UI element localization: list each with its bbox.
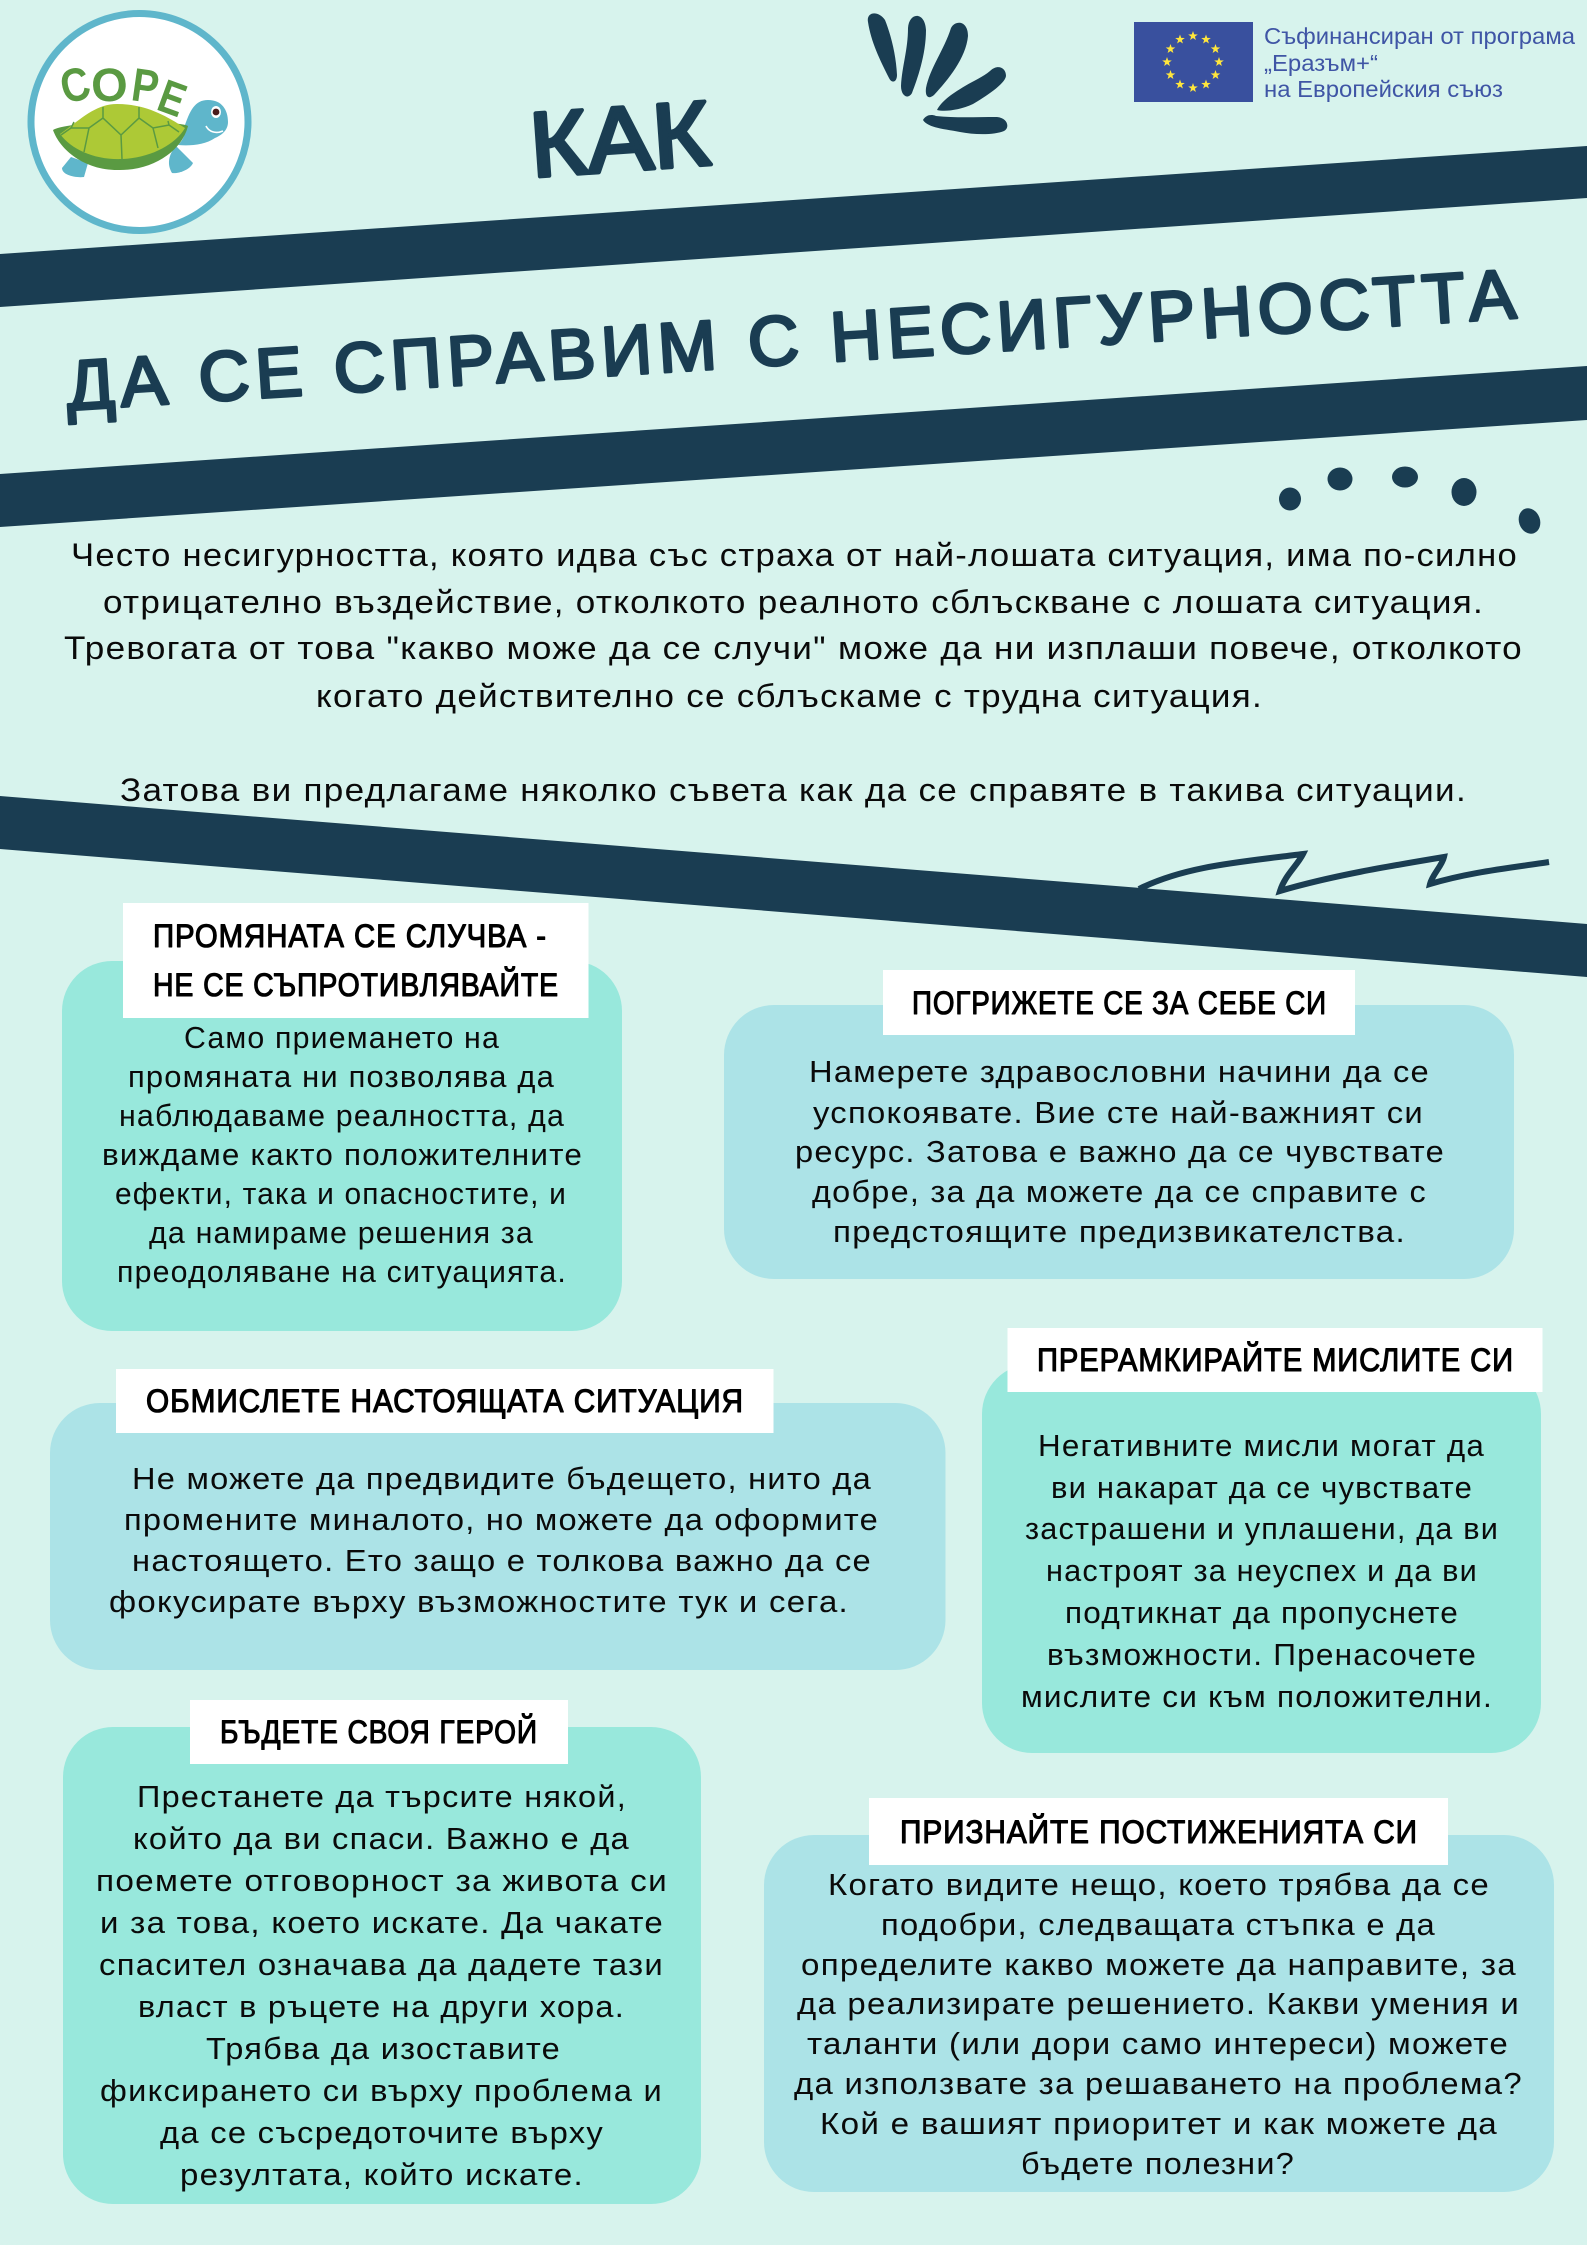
panel body text: и за това, което искате. Да чакате: [100, 1905, 664, 1940]
panel body text: ви накарат да се чувствате: [1051, 1470, 1473, 1505]
panel heading: [1008, 1328, 1542, 1392]
decoration: diagonal divider band: [0, 796, 1587, 977]
panel body text: резултата, който искате.: [180, 2157, 584, 2192]
logo: EU co-funding mark: [1134, 22, 1575, 102]
panel body text: [795, 1054, 1445, 1249]
panel body text: Само приемането на: [184, 1020, 500, 1055]
intro text: Често несигурността, която идва със страха от най-лошата ситуация, има по-силно: [71, 537, 1518, 573]
panel body text: успокоявате. Вие сте най-важният си: [813, 1095, 1424, 1130]
logo wordmark: C: [55, 57, 96, 114]
panel: acknowledge your achievements: [764, 1798, 1554, 2192]
co-funding text: на Европейския съюз: [1264, 76, 1503, 102]
panel body text: да намираме решения за: [149, 1215, 534, 1250]
panel body text: Трябва да изоставите: [206, 2031, 561, 2066]
co-funding text: [1264, 23, 1575, 102]
panel body text: поемете отговорност за живота си: [96, 1863, 668, 1898]
panel: take care of yourself: [724, 970, 1514, 1279]
panel body text: Кой е вашият приоритет и как можете да: [820, 2106, 1498, 2141]
co-funding text: „Еразъм+“: [1264, 50, 1378, 76]
intro text: [64, 537, 1523, 808]
panel body text: промяната ни позволява да: [128, 1059, 555, 1094]
title: main line: ДА СЕ СПРАВИМ С НЕСИГУРНОСТТА: [64, 255, 1524, 425]
panel heading: НЕ СЕ СЪПРОТИВЛЯВАЙТЕ: [153, 967, 559, 1003]
panel body text: ресурс. Затова е важно да се чувствате: [795, 1134, 1445, 1169]
logo wordmark: E: [151, 70, 193, 128]
panel body text: който да ви спаси. Важно е да: [133, 1821, 630, 1856]
panel body text: възможности. Пренасочете: [1047, 1637, 1477, 1672]
panel heading: ПРЕРАМКИРАЙТЕ МИСЛИТЕ СИ: [1037, 1342, 1514, 1378]
panel body text: фокусирате върху възможностите тук и сега.: [109, 1584, 849, 1619]
panel body text: застрашени и уплашени, да ви: [1025, 1511, 1499, 1546]
panel heading: ПРИЗНАЙТЕ ПОСТИЖЕНИЯТА СИ: [900, 1814, 1418, 1850]
decoration: lower title band: [0, 366, 1587, 527]
panel body text: бъдете полезни?: [1021, 2146, 1295, 2181]
intro text: когато действително се сблъскаме с трудна ситуация.: [316, 678, 1263, 714]
panel heading: [883, 970, 1355, 1035]
panel body text: Престанете да търсите някой,: [137, 1779, 627, 1814]
panel heading: [123, 903, 588, 1018]
logo: COPE turtle badge: [31, 14, 248, 230]
icon: EU flag: [1134, 22, 1253, 102]
panel heading: ПОГРИЖЕТЕ СЕ ЗА СЕБЕ СИ: [912, 985, 1327, 1021]
panel body text: спасител означава да дадете тази: [99, 1947, 664, 1982]
panel body text: да реализирате решението. Какви умения и: [797, 1986, 1520, 2021]
intro text: Тревогата от това "какво може да се случи" може да ни изплаши повече, отколкото: [64, 630, 1523, 666]
panel: consider the present situation: [50, 1369, 946, 1670]
logo wordmark: O: [90, 57, 129, 112]
panel heading: ОБМИСЛЕТЕ НАСТОЯЩАТА СИТУАЦИЯ: [146, 1383, 744, 1419]
panel body text: Когато видите нещо, което трябва да се: [828, 1867, 1490, 1902]
panel body text: [102, 1020, 583, 1289]
panel body text: предстоящите предизвикателства.: [833, 1214, 1406, 1249]
panel body text: Намерете здравословни начини да се: [809, 1054, 1430, 1089]
panel body text: настоящето. Ето защо е толкова важно да се: [132, 1543, 872, 1578]
decoration: burst strokes: [868, 13, 1007, 134]
panel body text: фиксирането си върху проблема и: [100, 2073, 663, 2108]
panel body text: настроят за неуспех и да ви: [1046, 1553, 1478, 1588]
panel body text: да се съсредоточите върху: [160, 2115, 604, 2150]
panel body text: наблюдаваме реалността, да: [119, 1098, 565, 1133]
panel body text: [96, 1779, 668, 2192]
panel heading: БЪДЕТЕ СВОЯ ГЕРОЙ: [220, 1714, 538, 1750]
panel body text: добре, за да можете да се справите с: [812, 1174, 1427, 1209]
panel: be your own hero: [63, 1700, 701, 2204]
icon: turtle legs: [62, 146, 193, 177]
panel heading: [190, 1700, 568, 1764]
panel body text: преодоляване на ситуацията.: [117, 1254, 567, 1289]
title: first word: КАК: [526, 83, 713, 197]
panel body text: промените миналото, но можете да оформите: [124, 1502, 879, 1537]
panel body text: власт в ръцете на други хора.: [138, 1989, 625, 2024]
intro text: отрицателно въздействие, отколкото реалното сблъскване с лошата ситуация.: [103, 584, 1484, 620]
logo wordmark: P: [129, 59, 162, 114]
icon: turtle head: [178, 100, 228, 145]
panel body text: [109, 1461, 879, 1619]
panel body text: определите какво можете да направите, за: [801, 1947, 1517, 1982]
panel body text: таланти (или дори само интереси) можете: [807, 2026, 1509, 2061]
panel heading: [116, 1369, 774, 1433]
panel heading: ПРОМЯНАТА СЕ СЛУЧВА -: [153, 918, 547, 954]
panel body text: ефекти, така и опасностите, и: [115, 1176, 567, 1211]
panel body text: Не можете да предвидите бъдещето, нито да: [132, 1461, 872, 1496]
co-funding text: Съфинансиран от програма: [1264, 23, 1575, 49]
intro text: Затова ви предлагаме няколко съвета как да се справяте в такива ситуации.: [120, 772, 1467, 808]
panel: reframe your thoughts: [982, 1328, 1542, 1753]
panel body text: виждаме както положителните: [102, 1137, 583, 1172]
panel body text: [794, 1867, 1523, 2181]
panel body text: подтикнат да пропуснете: [1065, 1595, 1459, 1630]
decoration: zigzag scribble: [1139, 854, 1549, 891]
decoration: curved dots: [1279, 466, 1544, 537]
icon: turtle shell: [53, 104, 188, 170]
panel body text: подобри, следващата стъпка е да: [881, 1907, 1436, 1942]
panel body text: Негативните мисли могат да: [1038, 1428, 1485, 1463]
panel body text: мислите си към положителни.: [1021, 1679, 1493, 1714]
decoration: upper title band: [0, 146, 1587, 307]
panel body text: [1021, 1428, 1499, 1714]
logo wordmark: [55, 57, 193, 128]
panel: change happens: [62, 903, 622, 1331]
panel heading: [869, 1798, 1448, 1865]
panel body text: да използвате за решаването на проблема?: [794, 2066, 1523, 2101]
